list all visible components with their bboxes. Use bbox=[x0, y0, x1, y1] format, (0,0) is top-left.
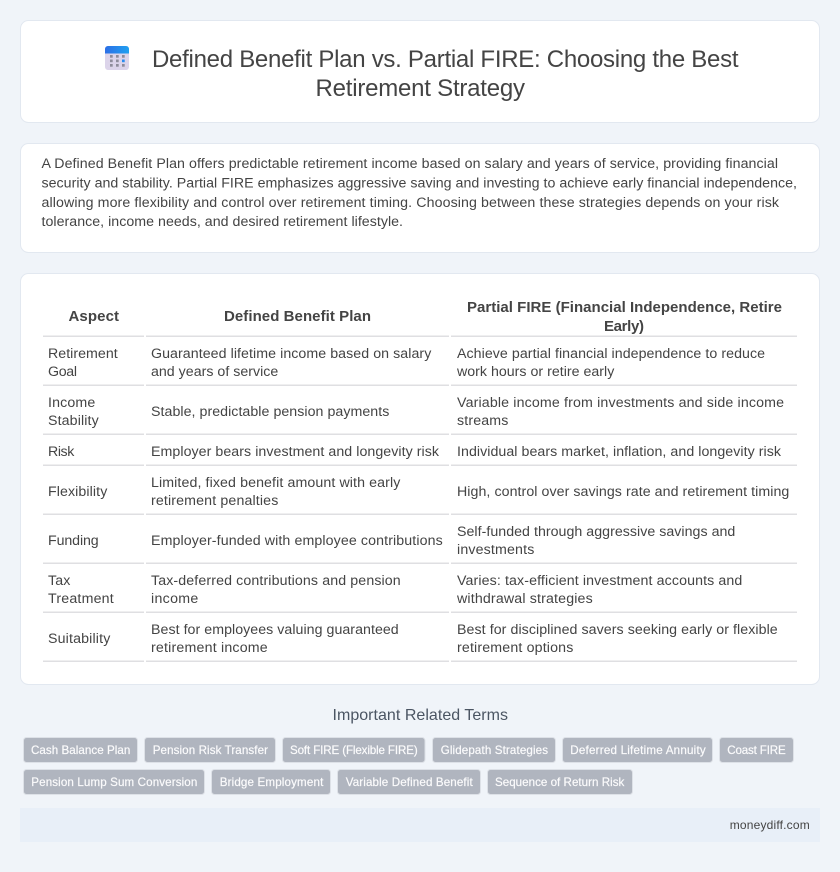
chip: deferred lifetime annuity: Deferred Lifetime Annuity bbox=[570, 744, 706, 757]
chip: pension lump sum conversion: Pension Lump Sum Conversion bbox=[31, 776, 197, 789]
row: retirement goal: Goal bbox=[48, 364, 77, 380]
chip: pension risk transfer: Pension Risk Transfer bbox=[153, 744, 268, 757]
row: retirement goal: work hours or retire early bbox=[456, 364, 615, 380]
row: funding: Employer-funded with employee contributions bbox=[151, 533, 443, 549]
row: tax treatment: income bbox=[151, 591, 198, 607]
row: suitability: Best for disciplined savers seeking early or flexible bbox=[457, 622, 778, 638]
row: funding: investments bbox=[457, 542, 534, 558]
row: suitability: retirement income bbox=[151, 640, 268, 656]
row: suitability: Suitability bbox=[48, 631, 111, 647]
chip: sequence of return risk: Sequence of Return Risk bbox=[495, 776, 625, 789]
table header row: Defined Benefit Plan bbox=[224, 308, 371, 325]
panel: description bbox=[20, 144, 820, 252]
row: flexibility: Flexibility bbox=[48, 484, 108, 500]
chip: variable defined benefit bbox=[338, 770, 480, 794]
row: suitability: Best for employees valuing guaranteed bbox=[151, 622, 399, 638]
row: tax treatment: Tax bbox=[48, 573, 70, 589]
row: funding: Self-funded through aggressive savings and bbox=[457, 524, 735, 540]
row: suitability: retirement options bbox=[457, 640, 573, 656]
row: risk: Employer bears investment and longevity risk bbox=[151, 444, 440, 460]
chip: cash balance plan: Cash Balance Plan bbox=[31, 744, 130, 757]
row: income stability: streams bbox=[457, 413, 508, 429]
table header row bbox=[43, 299, 797, 337]
chip: sequence of return risk bbox=[488, 770, 632, 794]
chip: cash balance plan bbox=[24, 738, 138, 762]
text block: description: tolerance, income needs, and desired retirement lifestyle. bbox=[42, 214, 403, 230]
row: flexibility: High, control over savings rate and retirement timing bbox=[457, 484, 789, 500]
chip: pension risk transfer bbox=[144, 738, 276, 762]
row: retirement goal: Guaranteed lifetime income based on salary bbox=[151, 346, 432, 362]
chip: variable defined benefit: Variable Defined Benefit bbox=[346, 776, 473, 789]
chip: bridge employment bbox=[212, 770, 330, 794]
related terms chips bbox=[24, 738, 794, 794]
heading: important related terms: Important Related Terms bbox=[332, 707, 508, 724]
table header row: Early) bbox=[604, 318, 644, 335]
text block: description: allowing more flexibility and control over retirement timing. Choosing between these strategies depends on your risk bbox=[42, 195, 780, 211]
chip: coast fire: Coast FIRE bbox=[727, 744, 786, 757]
title: Defined Benefit Plan vs. Partial FIRE: Choosing the Best bbox=[152, 46, 739, 73]
panel: title header bbox=[20, 20, 820, 122]
row: tax treatment bbox=[43, 573, 797, 613]
row: income stability: Income bbox=[48, 395, 95, 411]
chip: soft fire: Soft FIRE (Flexible FIRE) bbox=[290, 744, 418, 757]
panel: comparison table bbox=[20, 274, 820, 684]
chip: bridge employment: Bridge Employment bbox=[220, 776, 324, 789]
row: suitability bbox=[43, 622, 797, 662]
row: income stability: Stability bbox=[48, 413, 100, 429]
icon: calendar bbox=[105, 46, 129, 70]
text block: description bbox=[42, 156, 797, 230]
row: income stability: Stable, predictable pension payments bbox=[151, 404, 389, 420]
row: risk: Risk bbox=[48, 444, 75, 460]
row: income stability bbox=[43, 395, 797, 435]
chip: deferred lifetime annuity bbox=[562, 738, 712, 762]
row: tax treatment: withdrawal strategies bbox=[456, 591, 593, 607]
chip: coast fire bbox=[720, 738, 794, 762]
chip: pension lump sum conversion bbox=[24, 770, 204, 794]
chip: soft fire bbox=[282, 738, 425, 762]
row: risk bbox=[43, 444, 797, 466]
row: tax treatment: Treatment bbox=[48, 591, 114, 607]
text block: description: security and stability. Partial FIRE emphasizes aggressive saving and investing to achieve early financial independence, bbox=[42, 175, 797, 191]
row: funding bbox=[43, 524, 797, 564]
footer source text: moneydiff.com bbox=[730, 818, 810, 832]
chip: glidepath strategies: Glidepath Strategies bbox=[441, 744, 548, 757]
title: Retirement Strategy bbox=[316, 75, 525, 102]
table header row: Partial FIRE (Financial Independence, Retire bbox=[467, 299, 782, 316]
footer bar bbox=[20, 808, 820, 842]
chip: glidepath strategies bbox=[432, 738, 556, 762]
text block: description: A Defined Benefit Plan offers predictable retirement income based on salary and years of service, providing financial bbox=[42, 156, 778, 172]
row: funding: Funding bbox=[48, 533, 99, 549]
row: tax treatment: Tax-deferred contributions and pension bbox=[151, 573, 401, 589]
row: risk: Individual bears market, inflation, and longevity risk bbox=[457, 444, 782, 460]
row: flexibility: retirement penalties bbox=[151, 493, 278, 509]
row: retirement goal: and years of service bbox=[151, 364, 278, 380]
row: retirement goal: Retirement bbox=[48, 346, 118, 362]
row: retirement goal: Achieve partial financial independence to reduce bbox=[457, 346, 765, 362]
title bbox=[152, 46, 739, 102]
row: retirement goal bbox=[43, 346, 797, 386]
row: income stability: Variable income from investments and side income bbox=[457, 395, 784, 411]
table header row: Aspect bbox=[68, 308, 119, 325]
row: flexibility: Limited, fixed benefit amount with early bbox=[151, 475, 401, 491]
row: flexibility bbox=[43, 475, 797, 515]
row: tax treatment: Varies: tax-efficient investment accounts and bbox=[457, 573, 742, 589]
